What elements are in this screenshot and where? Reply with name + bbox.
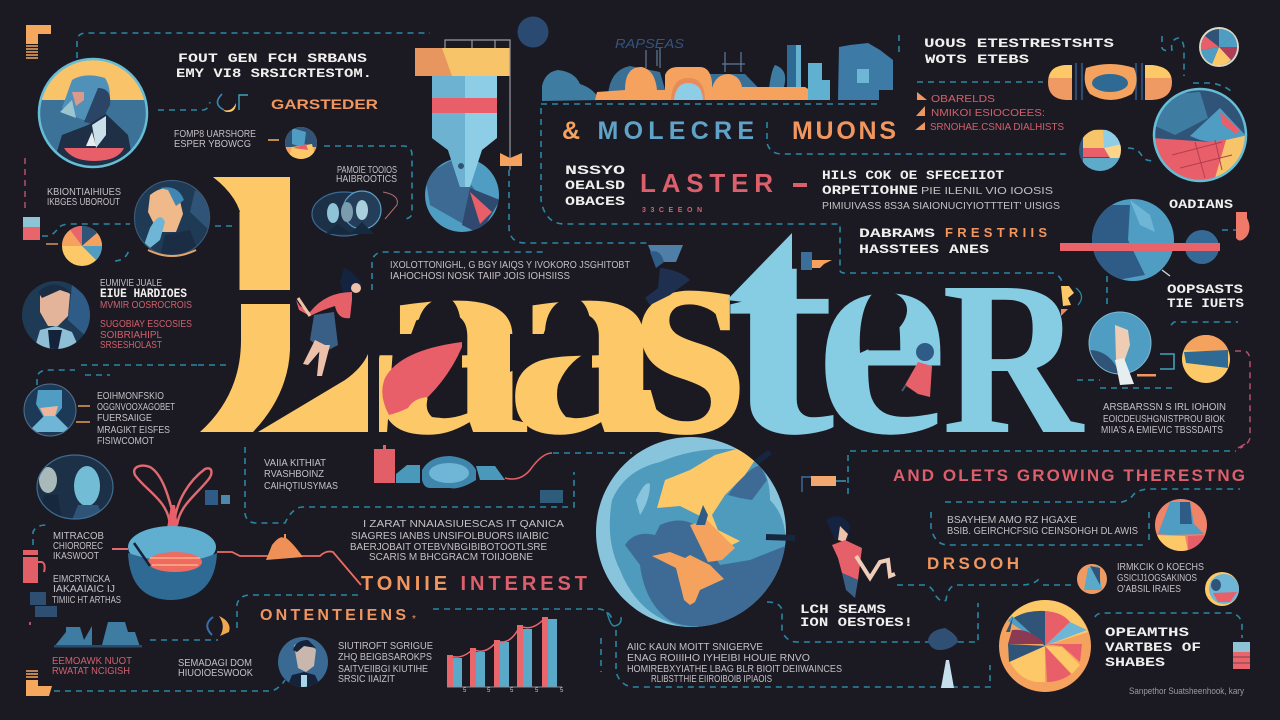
- axis labels: 5: [463, 688, 467, 694]
- icon: small badge right: [1205, 572, 1239, 606]
- axis: [447, 686, 562, 688]
- portrait: man in suit: [38, 58, 148, 170]
- orange tag: [500, 153, 522, 166]
- heading: muons: MUONS: [792, 117, 896, 145]
- text block: framed note: [947, 515, 1138, 537]
- illustration: giant pen nib: [415, 40, 522, 187]
- text block: lch seams: ION OESTOES!: [800, 615, 913, 630]
- text block: opeanths: SHABES: [1105, 655, 1165, 670]
- list: red bullet items: OBARELDS: [931, 94, 995, 105]
- ocean: [610, 449, 786, 628]
- text block: pot left: MITRACOB: [53, 531, 104, 542]
- heading: molecre: & MOLECRE: [562, 117, 754, 145]
- text block: drabrams fresh: DABRAMS: [859, 226, 935, 241]
- text block: bottom center: AIIC KAUN MOITT SNIGERVE: [627, 642, 763, 653]
- icon: right circle badge: [1155, 499, 1207, 551]
- illustration: skyline: [542, 43, 893, 101]
- heading: ontenteiens: ONTENTEIENS: [260, 607, 406, 624]
- portrait: couple: [37, 455, 113, 520]
- text block: oopsasts: [1167, 282, 1244, 311]
- text block: pot left: IAKAAIAIC IJ: [53, 584, 115, 595]
- illustration: woman on letter e: [902, 343, 934, 397]
- icon: crescent mark lower: [207, 616, 230, 636]
- text block: right of pen caption: PAMOIE TOOIOS: [337, 165, 397, 176]
- text block: right of pen caption: HAIBROOTICS: [336, 174, 397, 185]
- text block: left caption: KBIONTIAIHIUES: [47, 187, 121, 198]
- text block: oopsasts: OOPSASTS: [1167, 282, 1243, 297]
- text block: centre right: [822, 168, 1060, 212]
- text block: paragraph over title: [390, 260, 630, 282]
- text block: left lower: MRAGIKT EISFES: [97, 425, 170, 436]
- text block: central lower: SIAGRES IANBS UNSIFOLBUORS IIAIBIC: [351, 531, 549, 542]
- trend line: [450, 618, 545, 657]
- text block: paragraph over title: IAHOCHOSI NOSK TAIIP JOIS IOHSIISS: [390, 271, 570, 282]
- text block: right lower: ARSBARSSN S IRL IOHOIN: [1103, 402, 1226, 413]
- heading: top right: WOTS ETEBS: [925, 52, 1029, 67]
- illustration: big circle with red net: [1153, 88, 1248, 182]
- top-left heading text: EMY VI8 SRSICRTESTOM.: [176, 66, 372, 81]
- text block: nssyo: NSSYO: [565, 163, 625, 178]
- icon: loop connector: [607, 612, 621, 626]
- portrait: young man: [22, 281, 90, 350]
- text block: framed note: BSAYHEM AMO RZ HGAXE: [947, 515, 1077, 526]
- text block: left lower: [97, 391, 175, 447]
- text block: opeanths: [1105, 625, 1201, 670]
- icon: pointing hand: [801, 252, 832, 270]
- icon: bottom-left orange bracket: [26, 671, 52, 696]
- text block: small caption: FOMP8 UARSHORE: [174, 129, 256, 140]
- text block: portrait captions: MVMIR OOSROCROIS: [100, 300, 192, 311]
- icon: capsule: [1048, 63, 1172, 100]
- title letters aaster: e: [815, 170, 948, 496]
- text block: between badges: IRMKCIK O KOECHS: [1117, 562, 1204, 573]
- text block: portrait captions: [100, 278, 192, 351]
- text block: nssyo: OBACES: [565, 194, 625, 209]
- text block: portrait captions: EUMIVIE JUALE: [100, 278, 162, 289]
- title letters aaster: s: [632, 166, 747, 498]
- icon: stacked cards: [30, 592, 57, 625]
- pen top bar: [415, 48, 510, 76]
- text block: left lower: FISIWCOMOT: [97, 436, 154, 447]
- text block: opeanths: VARTBES OF: [1105, 640, 1201, 655]
- heading: top right: UOUS ETESTRESTSHTS: [924, 36, 1114, 51]
- illustration: low skyline: [54, 622, 142, 648]
- orange land: [690, 520, 735, 562]
- portrait 2 ring: [134, 180, 210, 256]
- pot handles: [112, 548, 128, 550]
- text block: central lower: SCARIS M BHCGRACM TOIIJOBNE: [369, 552, 533, 563]
- text block: central lower: [350, 519, 564, 563]
- pot: [128, 526, 216, 568]
- heading: laster with dash: 33CEEON: [642, 207, 702, 214]
- heading: laster with dash: LASTER: [640, 168, 773, 198]
- text block: drabrams fresh: [859, 225, 1047, 257]
- pie chart: left small: [62, 226, 102, 266]
- heading: garsteder: GARSTEDER: [271, 96, 378, 112]
- text block: low mid: [178, 658, 253, 679]
- text block: bottom center: [627, 642, 842, 685]
- icon: paired faces: [312, 191, 397, 236]
- text block: portrait captions: SRSESHOLAST: [100, 340, 162, 351]
- heading: ontenteiens: *: [412, 614, 416, 625]
- text block: portrait right: SRSIC IIAIZIT: [338, 674, 395, 685]
- axis labels: 5: [560, 688, 564, 694]
- title letters aaster: a: [505, 183, 663, 493]
- heading: top right: [924, 36, 1114, 67]
- title letters aaster: R: [942, 236, 1085, 480]
- text block: nssyo: OEALSD: [565, 178, 625, 193]
- text block: right of pen caption: [336, 165, 397, 185]
- text block: bottom center: HOMIREBXYIATHE LBAG BLR BIOIT DEIIWAINCES: [627, 664, 842, 675]
- bar chart: [447, 617, 564, 694]
- text block: portrait captions: SUGOBIAY ESCOSIES: [100, 319, 192, 330]
- icon: rock: [928, 628, 958, 650]
- text block: paragraph over title: IXOLOTTONIGHL, G BGY IAIQS Y IVOKORO JSGHITOBT: [390, 260, 630, 271]
- text block: between badges: GSICIJ1OGSAKINOS: [1117, 573, 1197, 584]
- text block: portrait right: SAITVEIIBGI KIUTIHE: [338, 664, 428, 675]
- icon: orange hill: [266, 534, 303, 560]
- text block: left lower: EOIHMONFSKIO: [97, 391, 164, 402]
- heading: and olets growing: AND OLETS GROWING THERESTNG: [893, 466, 1245, 485]
- title letter L: L: [210, 87, 405, 517]
- text block: lch seams: [800, 602, 913, 630]
- text block: small caption: ESPER YBOWCG: [174, 139, 251, 150]
- label: radseas: RAPSEAS: [615, 36, 684, 51]
- portrait: man with hand: [135, 181, 209, 256]
- portrait: thoughtful man: [1089, 312, 1151, 385]
- text block: portrait right: ZHQ BEIGBSAROKPS: [338, 652, 432, 663]
- text block: above pot center: RVASHBOINZ: [264, 469, 324, 480]
- text block: centre right: PIMIUIVASS 8S3A SIAIONUCIYIOTTTEIT' UISIGS: [822, 201, 1060, 212]
- yellow land: [657, 448, 755, 546]
- title t flare: [727, 233, 792, 320]
- text block: pot left: TIMIIC HT ARTHAS: [52, 595, 121, 606]
- pie chart: large: [999, 600, 1091, 692]
- axis labels: 5: [487, 688, 491, 694]
- text block: between badges: O'ABSIL IRAIES: [1117, 584, 1181, 595]
- list: red bullet items: NMIKOI ESIOCOEES:: [931, 108, 1045, 119]
- illustration: dark figure on letter s: [645, 245, 690, 305]
- footer credit: Sanpethor Suatsheenhook, kary: [1129, 686, 1244, 696]
- icon: cyan bracket and orange bar: [1137, 354, 1174, 376]
- text block: drabrams fresh: FRESTRIIS: [945, 225, 1047, 240]
- pen bar shade: [415, 48, 452, 76]
- illustration: world globe: [596, 437, 795, 628]
- illustration: planet with red bar: [1060, 199, 1250, 285]
- icon: small orange tag: [802, 476, 846, 492]
- heading: tonie interest: TONIIE INTEREST: [361, 573, 587, 595]
- title letters aaster: [372, 166, 1085, 498]
- icon: small badge left: [1077, 564, 1107, 594]
- text block: portrait right: SIUTIROFT SGRIGUE: [338, 641, 433, 652]
- text block: centre right: ORPETIOHNE: [822, 183, 918, 198]
- text block: portrait right: [338, 641, 433, 685]
- text block: above pot center: VAIIA KITHIAT: [264, 458, 326, 469]
- text block: centre right: HILS COK OE SFECEIIOT: [822, 168, 1004, 183]
- text block: opeanths: OPEAMTHS: [1105, 625, 1189, 640]
- text block: right lower: EOICDEUSHGNISTPROU BIOK: [1103, 414, 1225, 425]
- axis labels: 5: [535, 688, 539, 694]
- text block: lch seams: LCH SEAMS: [800, 602, 886, 617]
- portrait couple ring: [37, 455, 113, 519]
- title L shaped cuts and flares: [198, 172, 379, 436]
- icon: top-left orange bracket: [26, 25, 51, 58]
- illustration: running woman: [826, 516, 895, 598]
- text block: left lower: OGGNVOOXAGOBET: [97, 402, 175, 413]
- title letters aaster: a: [372, 183, 532, 493]
- text block: between badges: [1117, 562, 1204, 595]
- bars: [447, 617, 557, 687]
- text block: bottom center: ENAG ROIIIHO IYHEIBI HOUIE RNVO: [627, 653, 810, 664]
- title pink accent on a: [382, 342, 462, 415]
- text block: drabrams fresh: HASSTEES ANES: [859, 242, 989, 257]
- icon: red pink data tube: [23, 217, 58, 244]
- text block: portrait captions: SOIBRIAHIPL: [100, 330, 162, 341]
- text block: low mid: HIUOIOESWOOK: [178, 668, 253, 679]
- dark land: [625, 520, 788, 627]
- text block: small caption: [174, 129, 256, 150]
- top-left heading text: [176, 51, 372, 81]
- text block: right lower: MIIA'S A EMIEVIC TBSSDAITS: [1101, 425, 1223, 436]
- decorative moon: [518, 16, 548, 48]
- pin tail: [757, 452, 795, 538]
- top-left heading text: FOUT GEN FCH SRBANS: [178, 51, 367, 66]
- text block: central lower: BAERJOBAIT OTEBVNBGIBIBOTOOTLSRE: [350, 542, 547, 553]
- text block: low mid: SEMADAGI DOM: [178, 658, 252, 669]
- portrait: man with spiky hair: [278, 637, 328, 690]
- heading: laster with dash: [640, 168, 807, 214]
- main title: [198, 87, 1085, 517]
- text block: portrait captions: EIUE HARDIOES: [100, 286, 187, 301]
- axis labels: 5: [510, 688, 514, 694]
- text block: pot left: [52, 531, 121, 606]
- title letter counters: [378, 290, 907, 418]
- illustration: woman leaning on L: [296, 268, 362, 376]
- text block: centre right: PIE ILENIL VIO IOOSIS: [921, 186, 1053, 197]
- red orange cable: [217, 552, 361, 585]
- icon: yellow crescent with triangle: [1061, 286, 1082, 316]
- icon: crescent mark with bracket: [217, 94, 248, 112]
- text block: pot left: CHIOROREC: [53, 541, 103, 552]
- list: red bullet items: [915, 92, 1064, 133]
- text block: left lower: FUERSAIIGE: [97, 413, 152, 424]
- text block: above pot center: CAIHQTIUSYMAS: [264, 481, 338, 492]
- text block: pot left: IKASWOOT: [53, 551, 99, 562]
- text block: bottom center: RLIBSTTHIE EIIROIBOIB IPIAOIS: [651, 674, 772, 685]
- text block: central lower: I ZARAT NNAIASIUESCAS IT QANICA: [363, 519, 564, 530]
- pie chart: small mid: [1079, 129, 1122, 172]
- icon: small face circle: [268, 127, 317, 160]
- illustration: pot with ribbons: [112, 466, 217, 600]
- icon: orange lines: [1164, 520, 1184, 536]
- pen rail: [445, 40, 510, 170]
- axis labels: [463, 688, 564, 694]
- portrait: person by list: [24, 384, 90, 436]
- text block: right lower: [1101, 402, 1226, 436]
- pie chart: top right small: [1199, 27, 1239, 67]
- text block: pot left: EIMCRTNCKA: [53, 574, 110, 585]
- text block: above pot center: [264, 458, 338, 492]
- text block: low left red: RWATAT NCIGISH: [52, 666, 130, 677]
- list: red bullet items: SRNOHAE.CSNIA DIALHISTS: [930, 122, 1064, 133]
- title letters aaster: t: [725, 174, 838, 495]
- pale pocket: [636, 483, 650, 515]
- icon: orange circle badge: [1182, 335, 1230, 383]
- heading: drsooh: DRSOOH: [927, 554, 1019, 573]
- icon: striped tube: [1233, 642, 1250, 669]
- icon: red canister: [23, 550, 45, 583]
- text block: framed note: BSIB. GEIRCHCFSIG CEINSOHGH DL AWIS: [947, 526, 1138, 537]
- pen body: [432, 76, 497, 187]
- text block: low left red: EEMOAWK NUOT: [52, 656, 132, 667]
- text block: nssyo: [565, 163, 625, 209]
- ribbons: [134, 466, 211, 525]
- label: oadians: OADIANS: [1169, 197, 1233, 212]
- illustration: red tube and goggles device: [374, 445, 563, 503]
- portrait ring: [39, 59, 147, 167]
- text block: low left red: [52, 656, 132, 677]
- illustration: globe below nib: [425, 158, 500, 234]
- text block: left caption: IKBGES UBOROUT: [47, 197, 120, 208]
- text block: left caption: [47, 187, 121, 208]
- icon: light beam: [941, 660, 954, 688]
- icon: small tile: [205, 490, 230, 505]
- text block: oopsasts: TIE IUETS: [1167, 296, 1244, 311]
